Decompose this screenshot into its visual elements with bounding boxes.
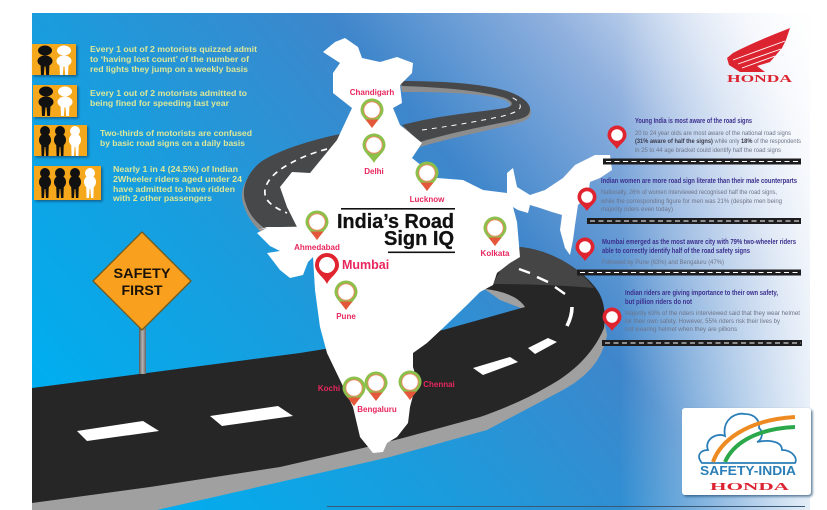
city pin: Kochi <box>318 376 366 406</box>
logo: Safety India Honda <box>682 408 811 495</box>
text: passengers statistic: 2Wheeler riders aged under 24 <box>113 174 242 184</box>
city pin: Pune: Pune <box>336 312 356 321</box>
text: passengers statistic: with 2 other passengers <box>112 193 212 203</box>
info: young India: (31% aware of half the signs) while only 18% of the respondents <box>635 138 801 145</box>
info: women vs men: while the corresponding figure for men was 21% (despite men being <box>600 198 782 205</box>
info: women vs men: majority riders even today) <box>601 206 673 213</box>
info: women vs men: Nationally, 26% of women interviewed recognised half the road signs, <box>601 189 777 196</box>
info: women vs men <box>578 178 797 213</box>
icon: three figures <box>34 125 87 156</box>
text: speeding statistic: Every 1 out of 2 motorists admitted to <box>90 88 247 98</box>
title: India's Road Sign IQ: India’s Road <box>337 211 454 233</box>
city pin: Pune <box>334 280 358 321</box>
info: young India: Young India is most aware of the road signs <box>635 118 752 125</box>
info: helmets and pillion riders: not wearing helmet when they are pillions <box>625 326 738 333</box>
text: lost count statistic: red lights they jump on a weekly basis <box>90 64 248 74</box>
city pin: Delhi: Delhi <box>364 167 384 176</box>
left road curve <box>242 133 345 233</box>
divider road 2 <box>587 218 801 224</box>
city pin: Chennai: Chennai <box>423 380 455 389</box>
logo: Honda wing: HONDA <box>727 73 792 85</box>
info: helmets and pillion riders: Majority 63% of the riders interviewed said that they wear helmet <box>625 310 800 317</box>
city pin: Mumbai <box>315 253 389 284</box>
icon: safety first sign: SAFETY <box>114 265 171 281</box>
map of India <box>257 38 612 453</box>
info: young India: 20 to 24 year olds are most aware of the national road signs <box>635 130 792 137</box>
info: helmets and pillion riders: Indian riders are giving importance to their own safety, <box>625 290 778 297</box>
info: Mumbai most aware <box>576 238 796 266</box>
city pin: Bengaluru <box>357 372 397 414</box>
text: passengers statistic: have admitted to have ridden <box>113 184 235 194</box>
text: speeding statistic <box>90 88 247 108</box>
info: helmets and pillion riders <box>602 290 800 333</box>
text: road sign confusion statistic: Two-thirds of motorists are confused <box>100 128 252 138</box>
text: road sign confusion statistic: by basic road signs on a daily basis <box>100 138 245 148</box>
info: Mumbai most aware: Followed by Pune (63%) and Bengaluru (47%) <box>602 259 724 266</box>
city pin: Kochi: Kochi <box>318 384 340 393</box>
info: helmets and pillion riders: but pillion riders do not <box>625 299 693 306</box>
city pin: Chandigarh: Chandigarh <box>350 88 394 97</box>
divider road 4 <box>602 340 802 346</box>
road dashes <box>77 338 557 441</box>
logo: Safety India Honda: HONDA <box>710 482 791 493</box>
city pin: Chandigarh <box>350 88 394 128</box>
info: Mumbai most aware: able to correctly identify half of the road safety signs <box>602 248 750 255</box>
city pin: Lucknow: Lucknow <box>410 195 445 204</box>
city pin: Mumbai: Mumbai <box>342 258 389 272</box>
divider road 1 <box>603 158 801 164</box>
text: speeding statistic: being fined for speeding last year <box>90 98 230 108</box>
logo: Safety India Honda: SAFETY-INDIA <box>700 464 796 478</box>
icon: safety first sign: FIRST <box>122 282 163 298</box>
text: lost count statistic <box>90 44 257 74</box>
city pin: Ahmedabad: Ahmedabad <box>294 243 340 252</box>
city pin: Bengaluru: Bengaluru <box>357 405 397 414</box>
icon: two figures, speeding <box>33 85 77 117</box>
text: lost count statistic: to ‘having lost count’ of the number of <box>90 54 249 64</box>
logo: Honda wing <box>727 28 792 85</box>
icon: two figures, lost count <box>32 44 76 75</box>
title: India's Road Sign IQ: Sign IQ <box>384 228 454 250</box>
main road <box>32 247 607 510</box>
icon: safety first sign <box>93 232 191 374</box>
info: helmets and pillion riders: for their own safety. However, 55% riders risk their lives by <box>625 318 781 325</box>
divider road 3 <box>577 270 801 276</box>
title: India's Road Sign IQ <box>337 208 455 253</box>
city pin: Chennai <box>398 370 455 400</box>
info: young India: in 25 to 44 age bracket could identify half the road signs <box>635 147 782 154</box>
city pin: Kolkata: Kolkata <box>481 249 510 258</box>
city pin: Kolkata <box>481 216 510 258</box>
text: lost count statistic: Every 1 out of 2 motorists quizzed admit <box>90 44 257 54</box>
text: road sign confusion statistic <box>100 128 252 148</box>
text: passengers statistic: Nearly 1 in 4 (24.5%) of Indian <box>113 164 238 174</box>
city pin: Lucknow <box>410 162 445 204</box>
upper road loop <box>400 81 531 147</box>
info: young India <box>608 118 801 154</box>
city pin: Ahmedabad <box>294 210 340 252</box>
text: passengers statistic <box>112 164 242 203</box>
icon: four figures <box>34 166 101 200</box>
city pin: Delhi <box>362 134 386 176</box>
info: Mumbai most aware: Mumbai emerged as the most aware city with 79% two-wheeler riders <box>602 239 796 246</box>
